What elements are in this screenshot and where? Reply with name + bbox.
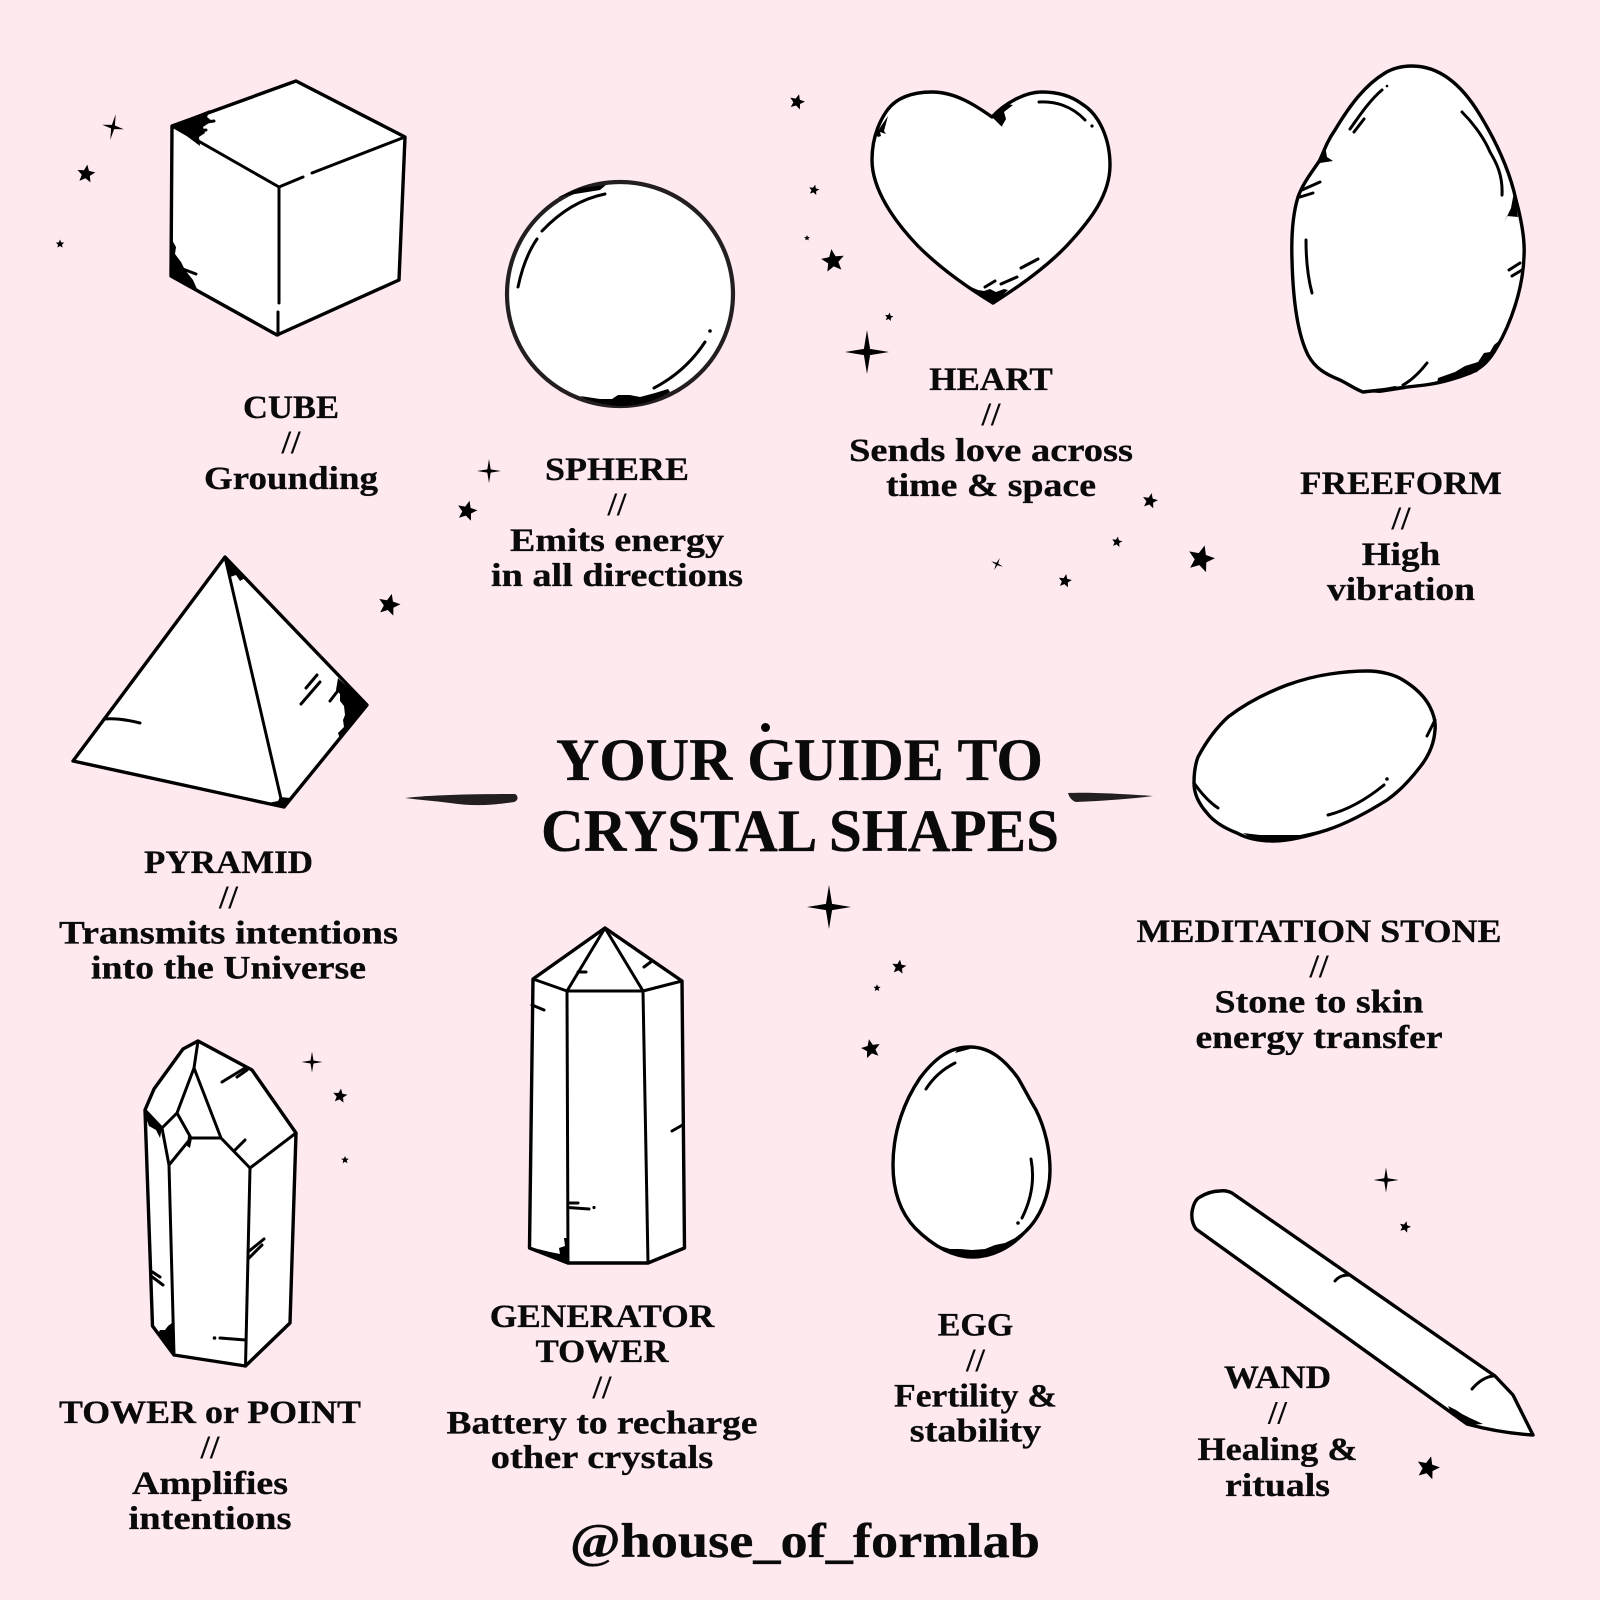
label: generator tower: GENERATOR: [490, 1299, 715, 1335]
icon: tower crystal: [145, 1041, 296, 1366]
label: egg: Fertility &: [894, 1378, 1057, 1414]
icon: generator tower crystal: [530, 928, 684, 1263]
label: tower or point: Amplifies: [132, 1466, 288, 1502]
label: wand: WAND: [1224, 1360, 1331, 1396]
title: YOUR GUIDE TO: [556, 727, 1043, 793]
label: egg: //: [965, 1343, 986, 1379]
panel: cube: [56, 81, 405, 497]
label: freeform: //: [1390, 501, 1411, 537]
stars: wand cluster: [1374, 1168, 1442, 1480]
label: tower or point: [59, 1395, 361, 1537]
icon: freeform crystal: [1292, 66, 1524, 393]
label: pyramid: //: [218, 880, 239, 916]
label: tower or point: intentions: [128, 1501, 292, 1537]
panel: meditation stone: [1136, 671, 1502, 1056]
label: generator tower: [446, 1299, 758, 1476]
label: meditation stone: //: [1308, 949, 1329, 985]
label: heart: time & space: [886, 468, 1096, 504]
label: egg: EGG: [938, 1308, 1013, 1344]
label: sphere: in all directions: [491, 558, 743, 594]
star: pyramid: [376, 591, 402, 617]
label: egg: [894, 1308, 1057, 1450]
label: sphere: Emits energy: [510, 523, 725, 559]
label: meditation stone: [1136, 914, 1502, 1056]
title: [541, 727, 1059, 864]
panel: egg: [860, 959, 1057, 1450]
stars: sphere cluster: [455, 459, 501, 522]
label: freeform: [1300, 466, 1502, 608]
label: generator tower: other crystals: [491, 1440, 713, 1476]
panel: tower or point: [59, 1041, 361, 1537]
icon: cube crystal: [171, 81, 405, 335]
label: pyramid: into the Universe: [91, 950, 366, 986]
label: wand: rituals: [1225, 1468, 1330, 1504]
stars: heart cluster: [788, 92, 894, 374]
label: heart: //: [980, 397, 1001, 433]
label: tower or point: TOWER or POINT: [59, 1395, 361, 1431]
label: wand: //: [1267, 1396, 1288, 1432]
icon: egg crystal: [893, 1046, 1050, 1258]
title dot: [761, 723, 770, 732]
icon: sphere crystal: [507, 182, 733, 406]
brush stroke right: [1068, 793, 1153, 802]
label: generator tower: //: [591, 1370, 612, 1406]
label: cube: Grounding: [204, 461, 379, 497]
label: wand: Healing &: [1198, 1432, 1358, 1468]
panel: freeform: [1292, 66, 1524, 608]
panel: generator tower: [446, 928, 758, 1476]
panel: heart: [788, 92, 1217, 588]
label: pyramid: PYRAMID: [144, 845, 313, 881]
stars: below heart cluster: [988, 492, 1217, 588]
label: heart: HEART: [929, 362, 1053, 398]
label: freeform: High: [1362, 537, 1440, 573]
handle: @house_of_formlab: [570, 1513, 1040, 1568]
label: heart: Sends love across: [849, 433, 1133, 469]
label: sphere: SPHERE: [545, 452, 689, 488]
label: generator tower: Battery to recharge: [446, 1406, 758, 1442]
icon: heart crystal: [872, 92, 1110, 304]
icon: meditation stone: [1194, 671, 1435, 842]
label: tower or point: //: [199, 1430, 220, 1466]
label: generator tower: TOWER: [536, 1334, 670, 1370]
label: cube: [204, 390, 379, 497]
label: heart: [849, 362, 1133, 504]
icon: pyramid crystal: [73, 557, 367, 808]
stars: cube cluster: [56, 112, 126, 248]
label: meditation stone: MEDITATION STONE: [1136, 914, 1502, 950]
label: meditation stone: energy transfer: [1196, 1020, 1442, 1056]
label: freeform: vibration: [1327, 572, 1475, 608]
panel: sphere: [455, 182, 743, 594]
stars: tower cluster: [302, 1052, 349, 1163]
label: pyramid: Transmits intentions: [59, 916, 398, 952]
panel: pyramid: [59, 557, 402, 986]
icon: wand crystal: [1192, 1191, 1533, 1435]
label: meditation stone: Stone to skin: [1214, 984, 1424, 1020]
label: egg: stability: [910, 1414, 1042, 1450]
panel: wand: [1192, 1168, 1533, 1504]
brush stroke left: [405, 794, 518, 805]
label: sphere: [491, 452, 743, 594]
label: pyramid: [59, 845, 398, 986]
stars: egg cluster: [860, 959, 907, 1059]
label: freeform: FREEFORM: [1300, 466, 1502, 502]
label: sphere: //: [606, 487, 627, 523]
label: cube: //: [280, 425, 301, 461]
label: cube: CUBE: [243, 390, 339, 426]
label: wand: [1198, 1360, 1358, 1504]
sparkle: below title: [807, 885, 851, 929]
title: CRYSTAL SHAPES: [541, 798, 1059, 864]
